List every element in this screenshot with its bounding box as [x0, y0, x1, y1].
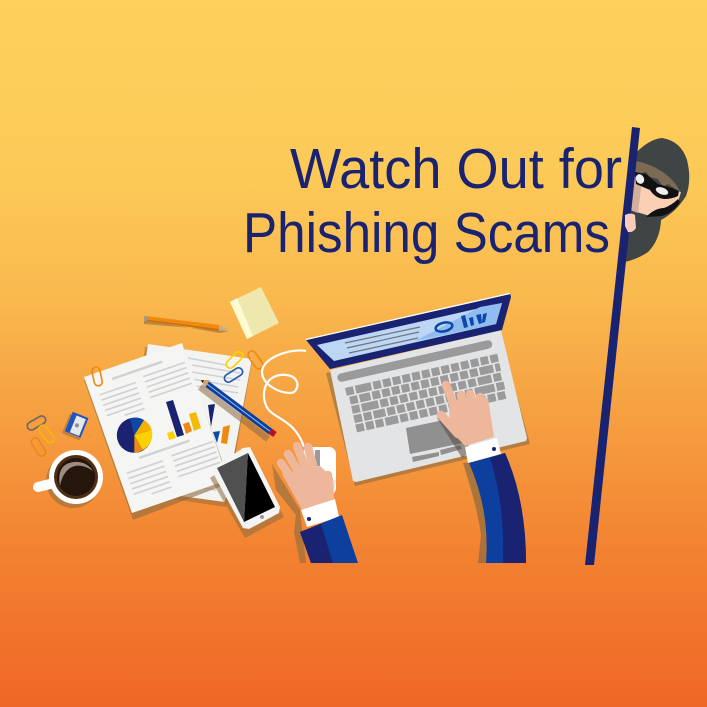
laptop — [306, 293, 530, 486]
mouse cable — [262, 350, 306, 447]
bar chart — [166, 400, 201, 440]
icon: paper clips top — [223, 350, 265, 384]
right shirt cuff — [465, 438, 501, 463]
icon: computer mouse — [303, 447, 336, 496]
left shirt cuff — [301, 499, 339, 527]
laptop lid — [306, 293, 511, 369]
pole — [585, 127, 640, 565]
thief hair — [635, 161, 680, 192]
icon: coffee mug — [38, 450, 103, 508]
back document — [125, 344, 252, 507]
title: Phishing Scams — [243, 201, 610, 265]
laptop base — [330, 330, 527, 482]
back document text lines — [188, 358, 240, 490]
title: Watch Out for — [290, 137, 622, 201]
front document text lines — [96, 355, 223, 499]
right hand and arm — [437, 385, 526, 563]
left sleeve — [300, 515, 358, 563]
icon: sticky note — [230, 287, 279, 339]
left hand — [281, 446, 334, 510]
laptop trackpad — [406, 418, 463, 454]
orange paper clip — [91, 366, 103, 387]
left hand and arm — [272, 446, 358, 563]
icon: orange pencil — [144, 316, 229, 333]
icon: smartphone — [210, 447, 284, 538]
icon: thief hand on pole — [625, 214, 636, 232]
icon: hooded thief — [625, 138, 689, 262]
right hand — [441, 385, 494, 446]
front document — [84, 343, 230, 520]
thief beard — [646, 199, 680, 217]
left arm shadow — [272, 464, 306, 563]
icon: pencil sharpener — [62, 411, 88, 440]
right sleeve — [469, 453, 526, 563]
keyboard — [342, 343, 506, 429]
thief mask — [635, 172, 679, 199]
icon: blue pencil — [200, 380, 275, 439]
icon: side paper clips — [26, 415, 56, 458]
title — [243, 137, 622, 265]
pie chart — [117, 418, 152, 453]
thief hood — [625, 138, 689, 262]
laptop screen — [317, 303, 502, 361]
back document bar chart — [208, 404, 230, 444]
thief face — [630, 176, 681, 216]
right arm shadow — [463, 462, 490, 563]
